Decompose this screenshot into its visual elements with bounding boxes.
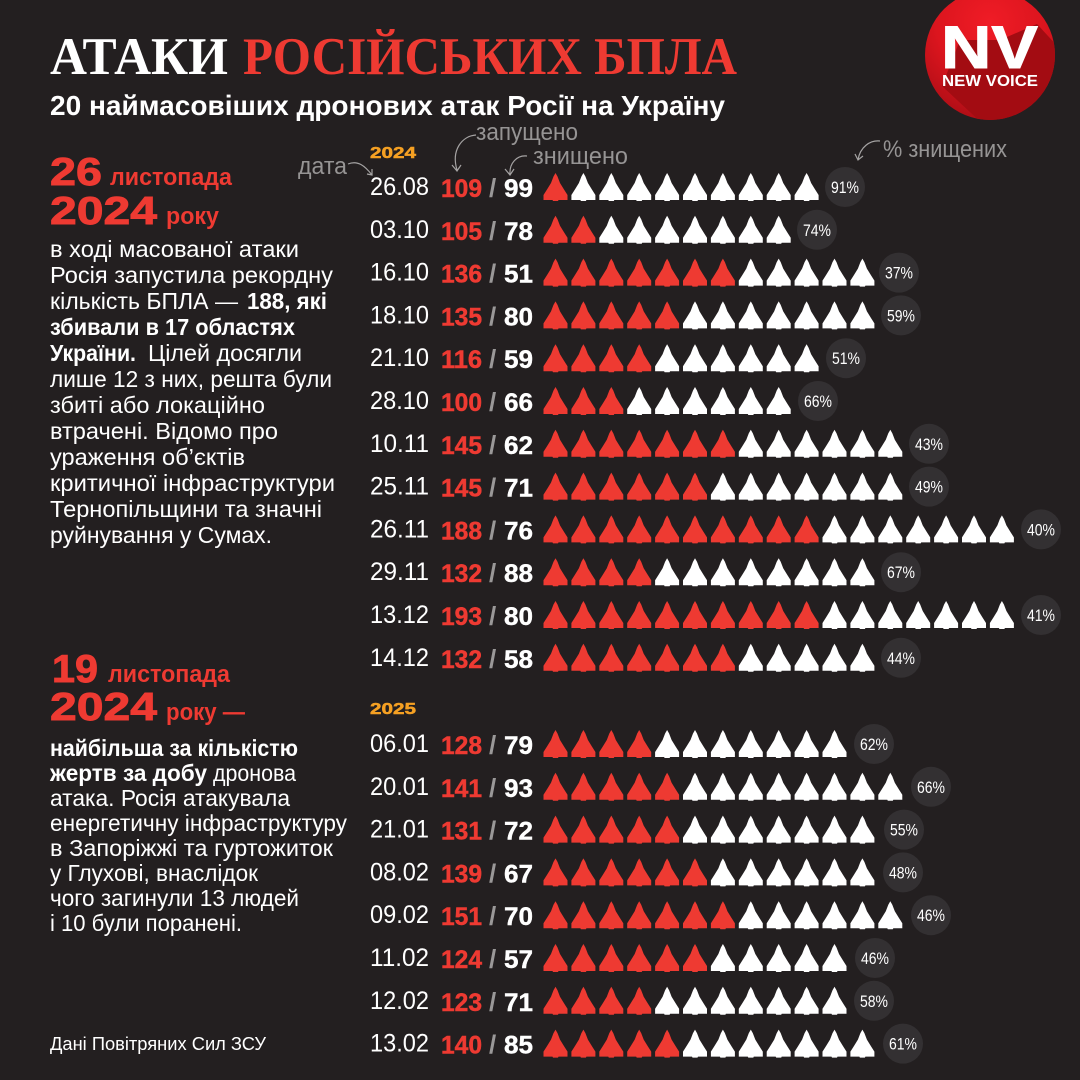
- row 26.11: [370, 509, 1061, 549]
- body text: 19 November attack: чого загинули 13 людей: [50, 885, 299, 911]
- title: РОСІЙСЬКИХ БПЛА: [243, 28, 737, 86]
- row 21.01: [370, 810, 924, 850]
- row 13.02: /: [489, 1030, 496, 1060]
- body text: 19 November attack: енергетичну інфраструктуру: [50, 810, 347, 836]
- row 11.02: 124: [441, 946, 482, 974]
- body text: 26 November attack: критичної інфраструктури: [50, 470, 335, 496]
- row 14.12: 58: [504, 646, 533, 674]
- row 21.10: [370, 338, 866, 378]
- body text: 26 November attack: 188, які: [247, 288, 327, 314]
- row 08.02: /: [489, 858, 496, 888]
- row 11.02: 57: [504, 946, 533, 974]
- row 26.11: /: [489, 515, 496, 545]
- row 13.02: [370, 1024, 923, 1064]
- row 11.02: [370, 938, 895, 978]
- row 21.01: 72: [504, 818, 533, 846]
- row 18.10: [370, 295, 921, 335]
- row 26.08: /: [489, 173, 496, 203]
- row 14.12: /: [489, 644, 496, 674]
- body text: 26 November attack: [50, 236, 335, 548]
- row 29.11: [370, 552, 921, 592]
- row 12.02: 58%: [860, 992, 888, 1011]
- heading: 26 листопада 2024 року: [50, 151, 233, 233]
- row 18.10: 59%: [887, 306, 915, 325]
- body text: 19 November attack: найбільша за кількістю: [50, 735, 298, 761]
- heading: 19 листопада 2024 року: 19: [52, 648, 98, 691]
- heading: 26 листопада 2024 року: року: [166, 203, 220, 230]
- heading: 19 листопада 2024 року: [50, 648, 245, 729]
- heading: 19 листопада 2024 року: 2024: [50, 686, 157, 729]
- row 06.01: 128: [441, 732, 482, 760]
- row 16.10: 51: [504, 261, 533, 289]
- row 26.08: 109: [441, 175, 482, 203]
- body text: 26 November attack: Тернопільщини та значні: [50, 496, 322, 522]
- heading: 19 листопада 2024 року: року —: [166, 699, 245, 726]
- body text: 26 November attack: кількість БПЛА —: [50, 288, 238, 314]
- row 10.11: [370, 424, 949, 464]
- row 08.02: 08.02: [370, 858, 429, 886]
- body text: 26 November attack: Росія запустила рекордну: [50, 262, 333, 288]
- row 13.12: /: [489, 601, 496, 631]
- row 18.10: /: [489, 301, 496, 331]
- body text: 26 November attack: збиті або локаційно: [50, 392, 265, 418]
- row 28.10: [370, 381, 838, 421]
- row 28.10: 66%: [804, 392, 832, 411]
- heading: 26 листопада 2024 року: листопада: [110, 164, 233, 191]
- year label 2024: 2024: [370, 145, 416, 162]
- row 21.01: /: [489, 816, 496, 846]
- row 03.10: 105: [441, 218, 482, 246]
- row 21.01: 55%: [890, 821, 918, 840]
- row 26.11: 26.11: [370, 515, 429, 543]
- legend labels and arrows: дата: [298, 153, 348, 180]
- row 11.02: 46%: [861, 949, 889, 968]
- row 20.01: 66%: [917, 778, 945, 797]
- title: [50, 28, 737, 86]
- row 21.10: 116: [441, 346, 482, 374]
- row 28.10: 100: [441, 389, 482, 417]
- row 25.11: 25.11: [370, 473, 429, 501]
- row 13.12: 13.12: [370, 601, 429, 629]
- body text: 26 November attack: в ході масованої атаки: [50, 236, 299, 262]
- body text: 26 November attack: руйнування у Сумах.: [50, 522, 272, 548]
- panel: 26 November text: [50, 151, 335, 548]
- row 26.08: 26.08: [370, 173, 429, 201]
- body text: 26 November attack: України.: [50, 340, 136, 366]
- row 03.10: 74%: [803, 221, 831, 240]
- row 08.02: [370, 852, 923, 892]
- heading: 19 листопада 2024 року: листопада: [108, 661, 231, 688]
- body text: 26 November attack: втрачені. Відомо про: [50, 418, 278, 444]
- row 06.01: 79: [504, 732, 533, 760]
- row 21.10: 21.10: [370, 344, 429, 372]
- row 09.02: /: [489, 901, 496, 931]
- legend labels and arrows: знищено: [533, 143, 628, 170]
- row 06.01: 62%: [860, 735, 888, 754]
- row 13.02: 13.02: [370, 1030, 429, 1058]
- row 25.11: [370, 467, 949, 507]
- row 18.10: 18.10: [370, 301, 429, 329]
- body text: 26 November attack: ураження об’єктів: [50, 444, 245, 470]
- row 26.11: 40%: [1027, 520, 1055, 539]
- chart: 2025 attacks: [370, 724, 951, 1064]
- row 13.02: 61%: [889, 1035, 917, 1054]
- row 25.11: 145: [441, 475, 482, 503]
- row 16.10: [370, 253, 919, 293]
- row 20.01: [370, 767, 951, 807]
- row 25.11: 71: [504, 475, 533, 503]
- logo: NV New Voice: NEW VOICE: [942, 73, 1038, 90]
- body text: 26 November attack: збивали в 17 областях: [50, 314, 295, 340]
- row 21.01: 21.01: [370, 816, 429, 844]
- logo: NV New Voice: NV: [941, 14, 1038, 81]
- row 14.12: 44%: [887, 649, 915, 668]
- row 26.11: 76: [504, 517, 533, 545]
- row 10.11: 10.11: [370, 430, 429, 458]
- body text: 19 November attack: і 10 були поранені.: [50, 910, 242, 936]
- heading: 26 листопада 2024 року: 2024: [50, 190, 157, 233]
- body text: 26 November attack: лише 12 з них, решта були: [50, 366, 332, 392]
- row 12.02: 12.02: [370, 987, 429, 1015]
- row 13.12: 193: [441, 603, 482, 631]
- row 25.11: /: [489, 473, 496, 503]
- row 20.01: 20.01: [370, 773, 429, 801]
- row 16.10: 136: [441, 261, 482, 289]
- row 03.10: 03.10: [370, 216, 429, 244]
- row 14.12: 14.12: [370, 644, 429, 672]
- row 28.10: 66: [504, 389, 533, 417]
- row 28.10: /: [489, 387, 496, 417]
- row 16.10: 16.10: [370, 259, 429, 287]
- row 10.11: 43%: [915, 435, 943, 454]
- row 16.10: /: [489, 259, 496, 289]
- row 21.10: 51%: [832, 349, 860, 368]
- row 11.02: /: [489, 944, 496, 974]
- row 09.02: 09.02: [370, 901, 429, 929]
- row 03.10: /: [489, 216, 496, 246]
- row 14.12: 132: [441, 646, 482, 674]
- row 20.01: 93: [504, 775, 533, 803]
- row 12.02: 123: [441, 989, 482, 1017]
- row 20.01: /: [489, 773, 496, 803]
- row 12.02: 71: [504, 989, 533, 1017]
- legend labels and arrows: [298, 119, 1007, 180]
- logo: NV New Voice: [925, 0, 1055, 120]
- row 08.02: 139: [441, 860, 482, 888]
- year label 2025: 2025: [370, 701, 416, 718]
- body text: 26 November attack: Цілей досягли: [148, 340, 302, 366]
- subtitle: 20 наймасовіших дронових атак Росії на Україну: [50, 90, 725, 121]
- row 12.02: /: [489, 987, 496, 1017]
- row 03.10: [370, 210, 837, 250]
- body text: 19 November attack: у Глухові, внаслідок: [50, 860, 259, 886]
- row 09.02: [370, 895, 951, 935]
- row 11.02: 11.02: [370, 944, 429, 972]
- row 13.02: 140: [441, 1032, 482, 1060]
- title: АТАКИ: [50, 28, 228, 86]
- body text: 19 November attack: в Запоріжжі та гуртожиток: [50, 835, 334, 861]
- row 29.11: 67%: [887, 563, 915, 582]
- body text: 19 November attack: дронова: [213, 760, 296, 786]
- chart: 2024 attacks: [370, 167, 1061, 678]
- row 13.02: 85: [504, 1032, 533, 1060]
- row 26.08: [370, 167, 865, 207]
- row 29.11: 88: [504, 560, 533, 588]
- row 06.01: [370, 724, 894, 764]
- row 09.02: 46%: [917, 906, 945, 925]
- row 28.10: 28.10: [370, 387, 429, 415]
- body text: 19 November attack: атака. Росія атакувала: [50, 785, 290, 811]
- row 18.10: 80: [504, 303, 533, 331]
- row 14.12: [370, 638, 921, 678]
- row 26.11: 188: [441, 517, 482, 545]
- legend labels and arrows: запущено: [476, 119, 578, 146]
- body text: 19 November attack: жертв за добу: [49, 760, 207, 786]
- legend labels and arrows: % знищених: [883, 136, 1007, 163]
- row 26.08: 99: [504, 175, 533, 203]
- row 16.10: 37%: [885, 264, 913, 283]
- row 26.08: 91%: [831, 178, 859, 197]
- row 13.12: 41%: [1027, 606, 1055, 625]
- row 06.01: 06.01: [370, 730, 429, 758]
- row 25.11: 49%: [915, 478, 943, 497]
- source note: Дані Повітряних Сил ЗСУ: [50, 1034, 267, 1054]
- row 08.02: 67: [504, 860, 533, 888]
- row 10.11: 62: [504, 432, 533, 460]
- row 09.02: 151: [441, 903, 482, 931]
- heading: 26 листопада 2024 року: 26: [50, 151, 102, 194]
- row 29.11: 29.11: [370, 558, 429, 586]
- row 29.11: 132: [441, 560, 482, 588]
- panel: 19 November text: [49, 648, 347, 936]
- row 20.01: 141: [441, 775, 482, 803]
- row 29.11: /: [489, 558, 496, 588]
- row 03.10: 78: [504, 218, 533, 246]
- row 21.01: 131: [441, 818, 482, 846]
- row 09.02: 70: [504, 903, 533, 931]
- row 13.12: [370, 595, 1061, 635]
- row 21.10: 59: [504, 346, 533, 374]
- row 10.11: /: [489, 430, 496, 460]
- row 10.11: 145: [441, 432, 482, 460]
- row 12.02: [370, 981, 894, 1021]
- row 06.01: /: [489, 730, 496, 760]
- row 21.10: /: [489, 344, 496, 374]
- row 18.10: 135: [441, 303, 482, 331]
- body text: 19 November attack: [49, 735, 347, 936]
- row 08.02: 48%: [889, 863, 917, 882]
- row 13.12: 80: [504, 603, 533, 631]
